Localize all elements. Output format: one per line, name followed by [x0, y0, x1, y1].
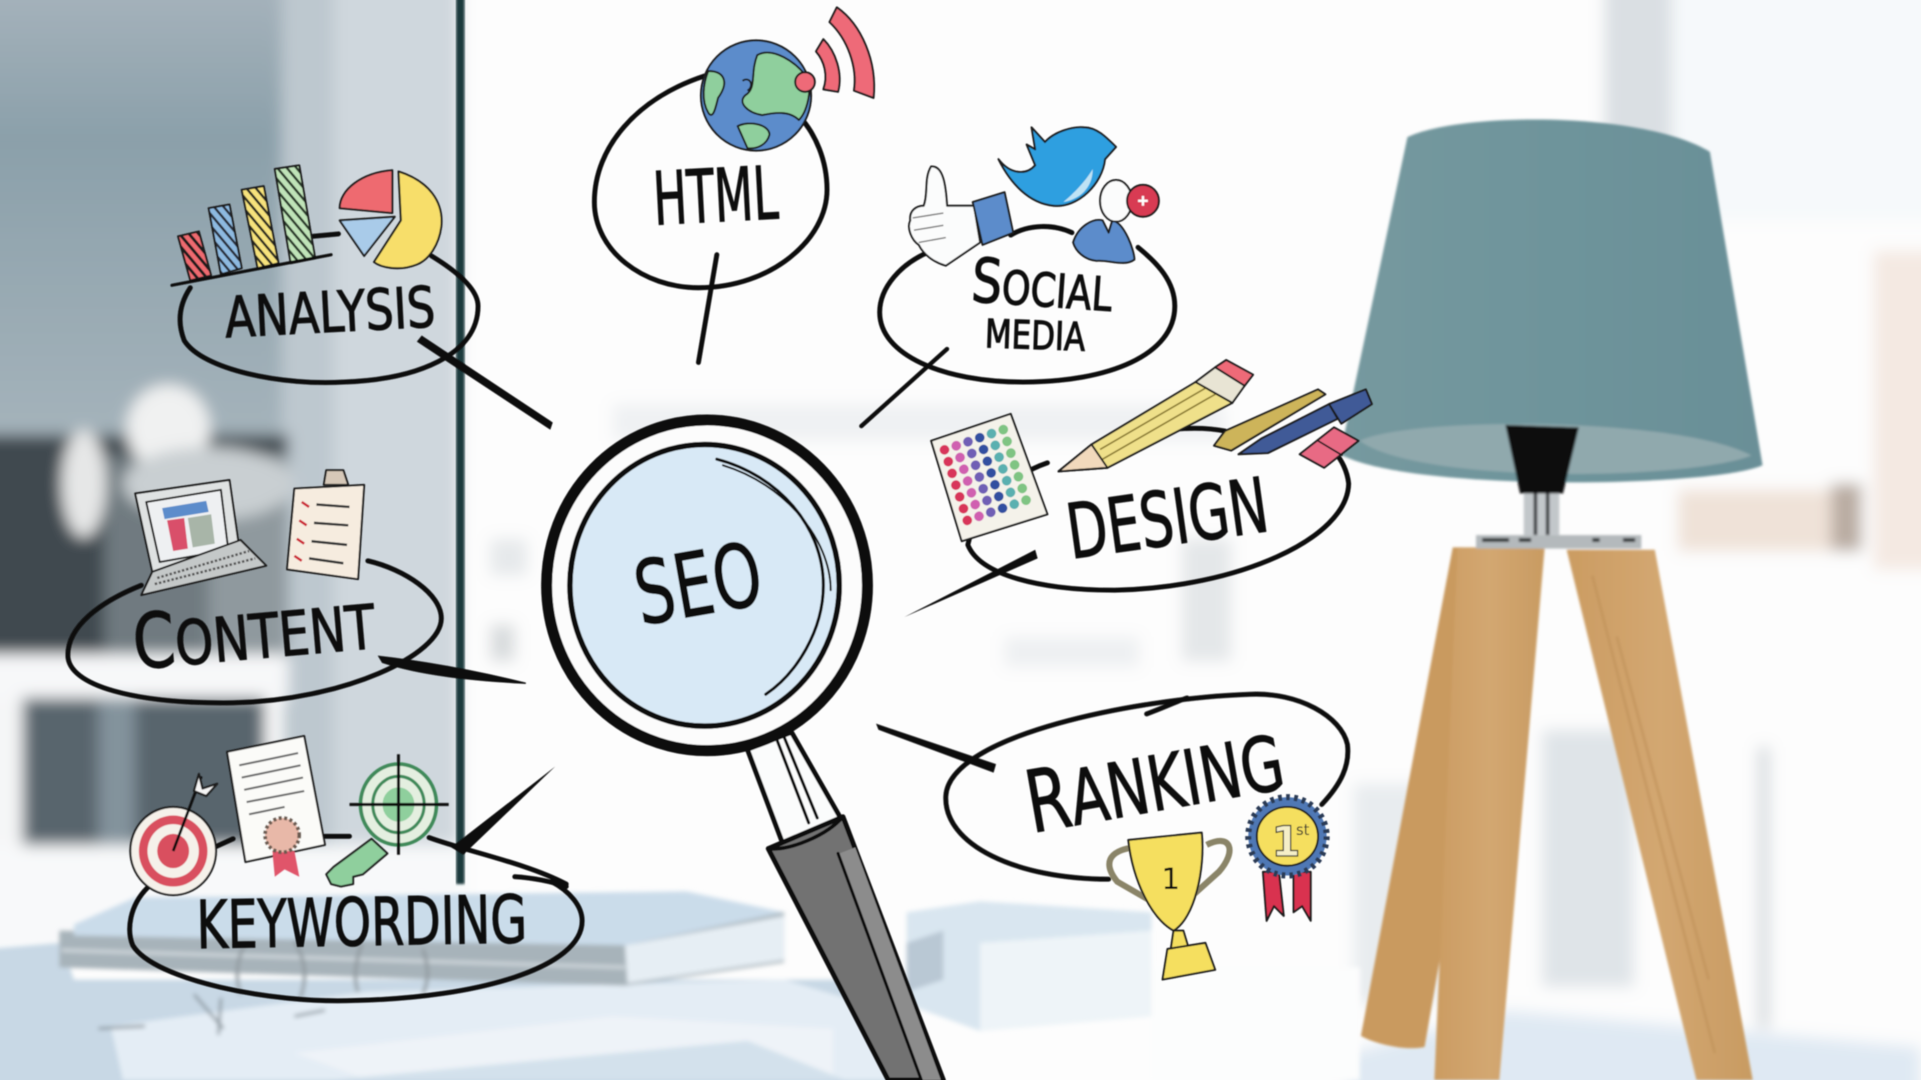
sketch artwork: [68, 7, 1372, 1080]
icon: small pencil: [1214, 389, 1325, 451]
label: KEYWORDING: KEYWORDING: [196, 881, 528, 964]
icon: medal: st: [1296, 822, 1310, 839]
connector: [451, 767, 555, 855]
floor: [1347, 1010, 1920, 1080]
icon: medal: 1: [1272, 817, 1300, 866]
label: SEO: SEO: [627, 522, 770, 646]
icon: thumbs up: [909, 166, 1013, 266]
icon: clipboard: [287, 470, 364, 579]
icon: laptop: [135, 480, 266, 595]
left wall: [0, 0, 282, 441]
dark building: [0, 435, 288, 661]
handle grip: [768, 817, 943, 1080]
icon: wifi signal: [795, 7, 874, 98]
icon: certificate: [227, 736, 325, 877]
label: RANKING: RANKING: [1018, 710, 1291, 854]
icon: crosshair target: [349, 754, 449, 855]
connector: [904, 550, 1038, 617]
icon: trophy: [1109, 833, 1230, 980]
icon: key: [326, 839, 387, 887]
lamp front leg: [1434, 547, 1545, 1080]
rim: [547, 420, 867, 751]
faint window blocks: [613, 404, 1225, 441]
magnifying glass: [547, 420, 943, 1080]
binder rings: [237, 940, 428, 998]
icon: trophy: 1: [1161, 862, 1180, 896]
icon: pen: [1238, 389, 1372, 454]
icon: large pencil: [1058, 360, 1253, 471]
Keywording node: [130, 736, 582, 1001]
label: CONTENT: CONTENT: [129, 578, 379, 687]
window frame line: [456, 0, 465, 884]
connector: [876, 724, 996, 773]
connector: [379, 656, 526, 683]
lamp: [1340, 119, 1763, 1080]
lamp socket: [1505, 425, 1579, 493]
lens: [570, 444, 839, 726]
lamp back leg: [1361, 547, 1476, 1048]
icon: pie chart: [340, 170, 442, 268]
handle neck: [747, 732, 840, 847]
icon: twitter bird: [998, 127, 1116, 206]
clouds: [127, 384, 210, 473]
stacked papers: [907, 901, 1152, 1031]
Social Media node: [861, 127, 1175, 426]
laptop: [59, 912, 784, 986]
right building elements: [1605, 0, 1672, 220]
label: ANALYSIS: ANALYSIS: [223, 275, 437, 351]
label: HTML: HTML: [651, 151, 780, 243]
Ranking node: [876, 694, 1348, 980]
icon: bullseye: [130, 774, 217, 895]
icon: medal: [1248, 797, 1327, 921]
HTML node: [594, 7, 874, 362]
lamp right leg: [1567, 550, 1753, 1080]
label: MEDIA: MEDIA: [984, 312, 1086, 361]
desk with laptop and binder: [0, 891, 1360, 1080]
icon: person: [1073, 180, 1159, 263]
icon: globe: [701, 40, 811, 151]
Analysis node: [172, 165, 553, 430]
icon: eraser: [1300, 427, 1358, 468]
label: SOCIAL: SOCIAL: [969, 245, 1115, 326]
connector: [417, 336, 553, 430]
Design node: [904, 360, 1372, 617]
shade inner: [1360, 424, 1752, 474]
lens highlight: [717, 459, 823, 694]
connector: [698, 255, 717, 362]
connector: [861, 349, 947, 426]
icon: colour palette: [931, 414, 1047, 541]
icon: bar chart: [172, 165, 331, 285]
lamp shade: [1340, 119, 1763, 482]
Content node: [68, 470, 526, 703]
label: DESIGN: DESIGN: [1061, 461, 1274, 577]
